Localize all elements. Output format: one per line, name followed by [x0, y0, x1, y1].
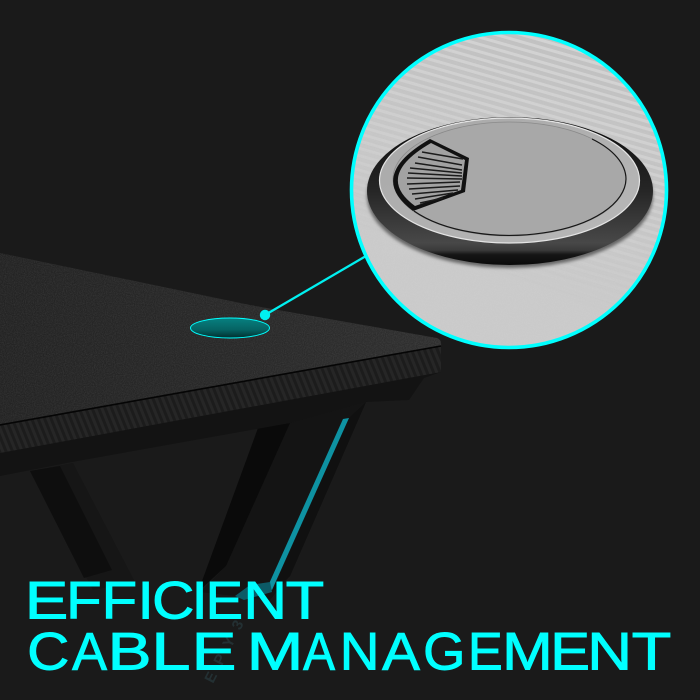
title line 1: F — [66, 572, 102, 631]
highlighted grommet hole — [190, 318, 270, 338]
title — [25, 572, 671, 682]
title line 1: I — [138, 572, 154, 631]
right desk leg panel — [200, 402, 366, 600]
cable fan notch — [393, 139, 469, 211]
title line 1: T — [286, 572, 324, 631]
magnified callout circle — [350, 30, 668, 350]
cyan leg light strip — [235, 418, 349, 600]
title line 2: N — [587, 623, 632, 682]
desk top surface — [0, 250, 445, 428]
desk underside frame — [0, 372, 441, 476]
grommet shadow — [365, 180, 656, 270]
cyan circle border — [352, 32, 666, 348]
title line 2: A — [72, 623, 108, 682]
title line 1: E — [25, 572, 68, 631]
title line 2: T — [632, 623, 671, 682]
left desk leg — [30, 463, 135, 590]
grommet outer black ring — [367, 117, 653, 265]
title line 2: L — [151, 623, 191, 682]
grommet silver plate — [380, 118, 640, 243]
title line 2: C — [27, 623, 69, 682]
title line 2: G — [423, 623, 465, 682]
gaming desk photo — [0, 250, 445, 686]
faint leg logo: EPY3 — [201, 618, 247, 686]
title line 2: E — [192, 623, 236, 682]
title line 2: E — [550, 623, 590, 682]
title line 1: I — [192, 572, 208, 631]
desk front edge carbon band — [0, 346, 441, 453]
title line 2: N — [340, 623, 380, 682]
title line 1: E — [206, 572, 243, 631]
title line 2: A — [303, 623, 336, 682]
grommet cover — [393, 122, 626, 236]
textured desk surface — [353, 34, 665, 346]
title line 2: M — [502, 623, 553, 682]
title line 2: M — [247, 623, 303, 682]
title line 2: E — [468, 623, 503, 682]
title line 2: B — [108, 623, 152, 682]
title line 1: F — [102, 572, 137, 631]
title line 1: N — [243, 572, 287, 631]
centre desk strut — [198, 423, 290, 592]
title line 1: C — [152, 572, 194, 631]
callout leader line — [260, 256, 366, 320]
title line 2: A — [382, 623, 421, 682]
